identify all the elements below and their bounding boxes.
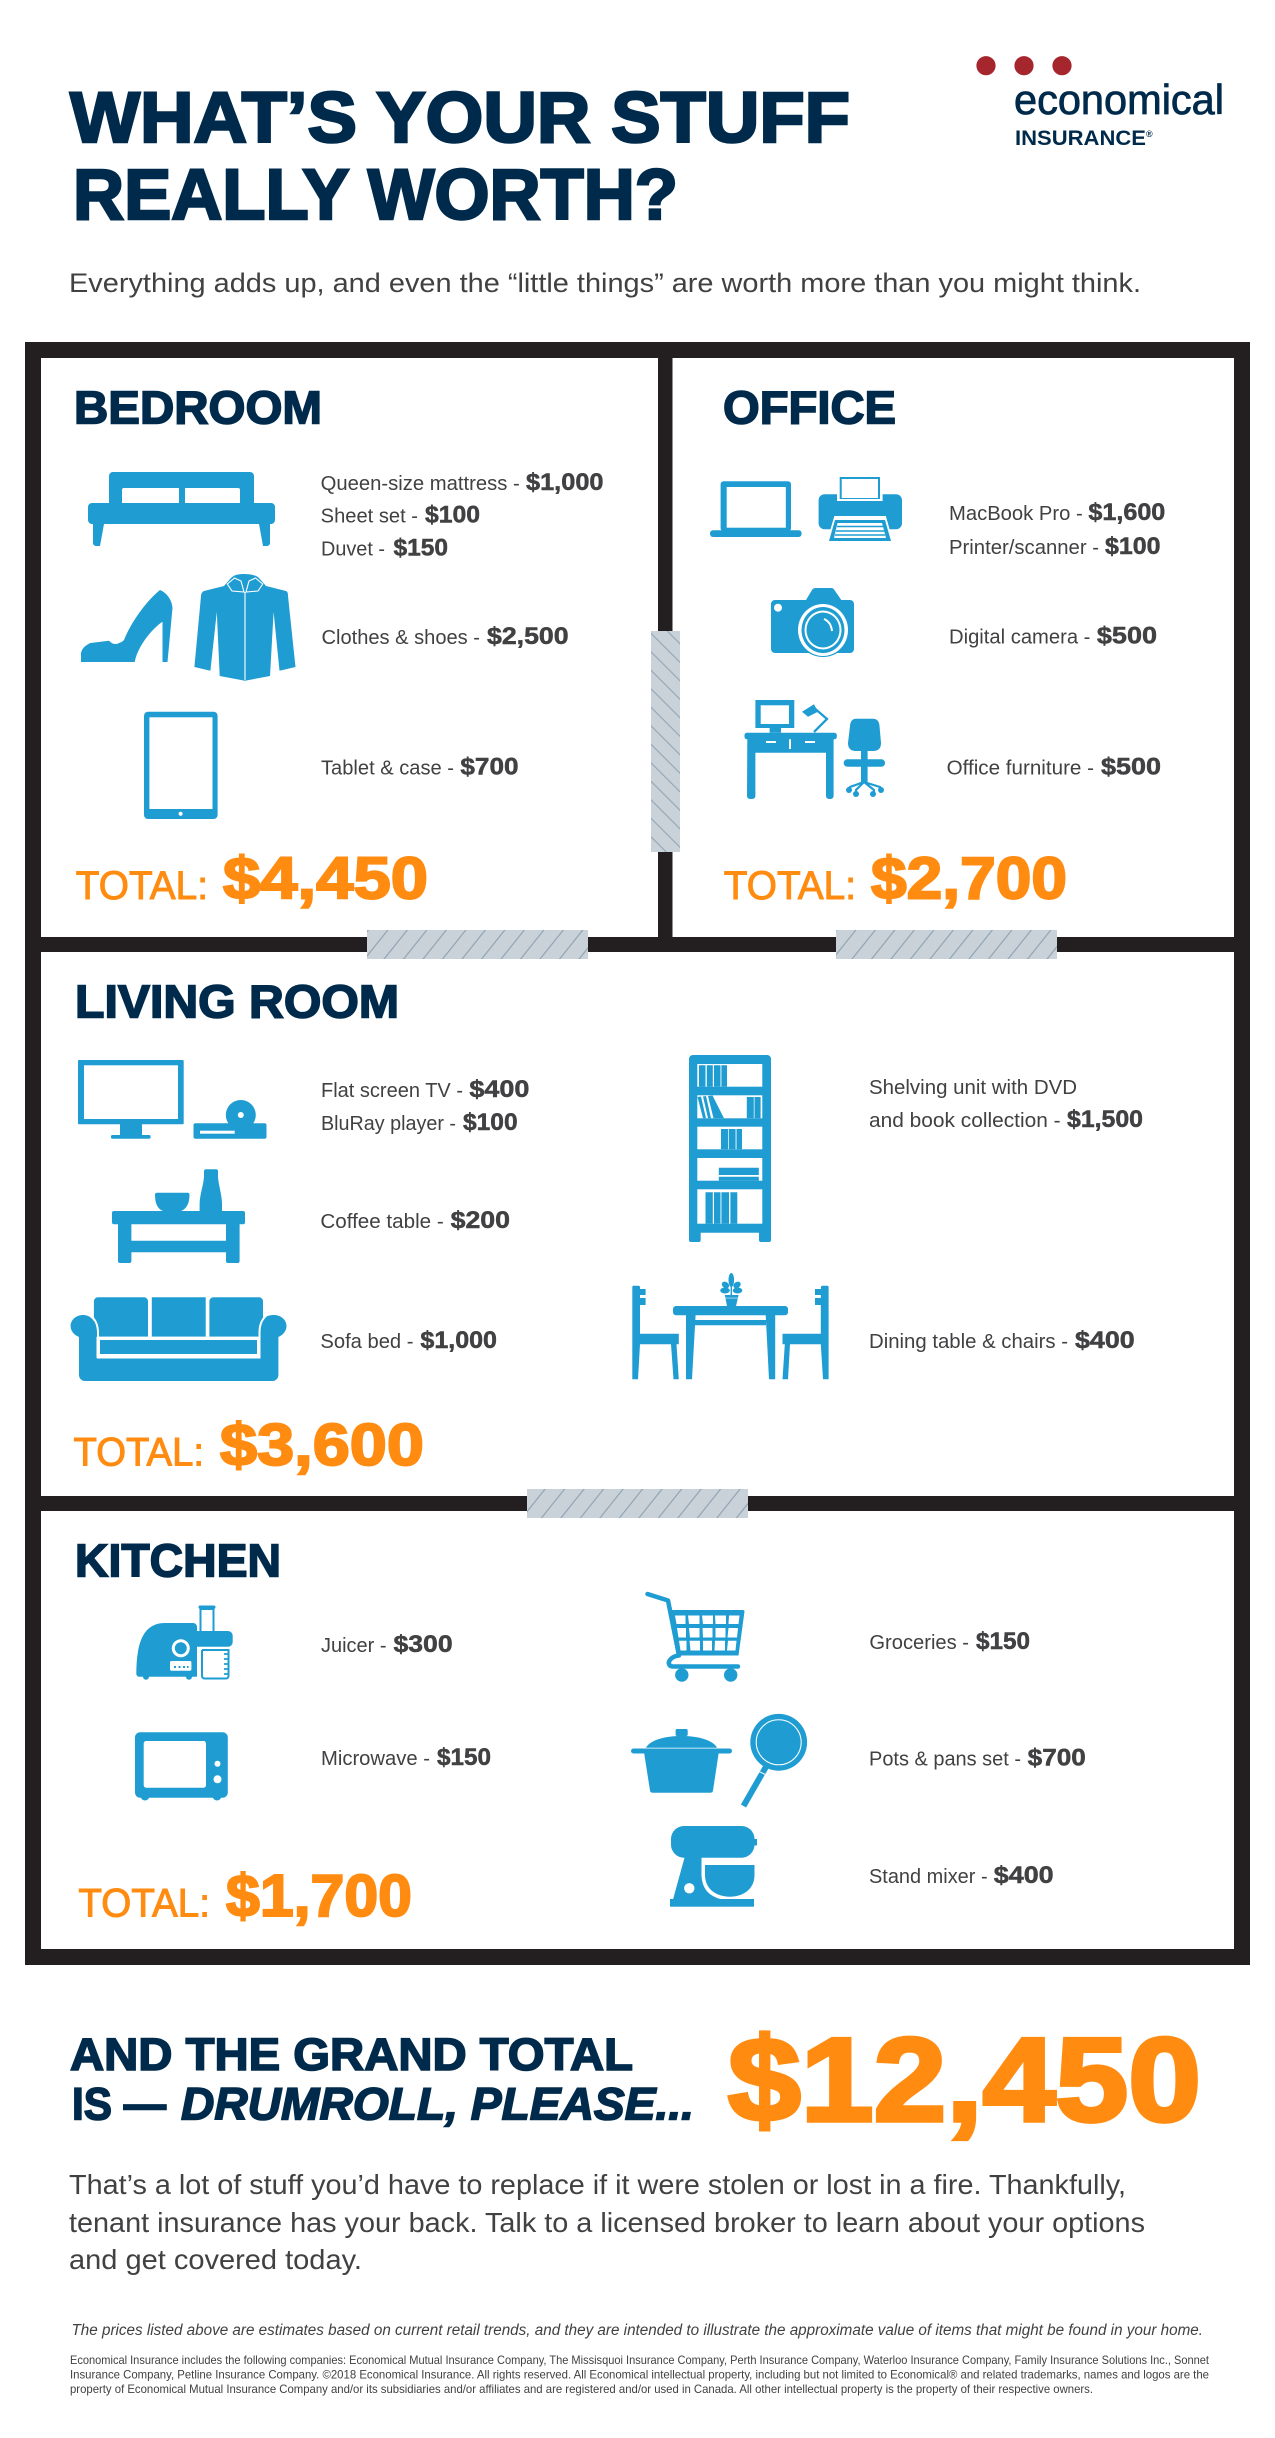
title: REALLY WORTH?	[73, 156, 678, 235]
icon: shopping cart	[648, 1594, 744, 1682]
item: dining table and chairs	[869, 1327, 1135, 1354]
heading: office: OFFICE	[723, 382, 896, 434]
item: coffee table: Coffee table -	[320, 1211, 444, 1233]
panel: kitchen	[75, 1534, 1086, 1929]
panel: bedroom	[74, 382, 604, 912]
grand total amount: $12,450	[728, 2014, 1201, 2147]
item: digital camera: Digital camera -	[949, 627, 1090, 649]
subtitle: Everything adds up, and even the “little things” are worth more than you might think.	[69, 268, 1141, 298]
item: stand mixer: $400	[994, 1862, 1054, 1889]
icon: desk, lamp and chair	[744, 700, 885, 799]
total: kitchen	[78, 1863, 412, 1929]
item: queen-size mattress: Queen-size mattress -	[321, 473, 520, 495]
item: shelving unit: and book collection -	[869, 1110, 1061, 1132]
icon: tablet	[144, 712, 218, 819]
item: duvet: Duvet -	[321, 539, 385, 561]
item: sofa bed: Sofa bed -	[320, 1331, 414, 1353]
total: bedroom	[76, 846, 428, 912]
item: juicer	[321, 1631, 453, 1658]
item: queen-size mattress: $1,000	[526, 469, 604, 496]
closing paragraph: tenant insurance has your back. Talk to a licensed broker to learn about your options	[69, 2207, 1145, 2238]
icon: shelving unit	[689, 1055, 771, 1242]
item: sheet set: Sheet set -	[321, 506, 418, 528]
closing paragraph: and get covered today.	[69, 2244, 362, 2275]
item: clothes and shoes: Clothes & shoes -	[322, 627, 480, 649]
item: printer scanner: $100	[1105, 533, 1160, 560]
total: office: TOTAL:	[724, 864, 856, 908]
closing paragraph: That’s a lot of stuff you’d have to replace if it were stolen or lost in a fire. Thankfully,	[69, 2169, 1126, 2200]
item: dining table and chairs: $400	[1075, 1327, 1135, 1354]
grand total heading: DRUMROLL, PLEASE...	[181, 2078, 694, 2130]
icon: bed	[88, 472, 275, 546]
item: sheet set	[321, 502, 480, 529]
item: microwave: $150	[437, 1744, 491, 1771]
item: groceries: Groceries -	[869, 1632, 969, 1654]
item: tablet and case	[321, 754, 518, 781]
item: macbook pro: MacBook Pro -	[949, 503, 1083, 525]
item: shelving unit: Shelving unit with DVD	[869, 1077, 1077, 1099]
logo: economical insurance: economical	[1014, 76, 1224, 123]
legal fine print	[70, 2353, 1210, 2396]
item: tablet and case: $700	[460, 754, 518, 781]
item: sheet set: $100	[425, 502, 480, 529]
item: pots and pans set: $700	[1028, 1745, 1086, 1772]
item: printer scanner: Printer/scanner -	[949, 537, 1099, 559]
total: living room	[74, 1412, 424, 1478]
item: microwave: Microwave -	[321, 1748, 430, 1770]
total: office: $2,700	[871, 846, 1067, 912]
icon: bluray player	[194, 1100, 266, 1139]
door: vertical between bedroom and office	[651, 631, 680, 852]
item: juicer: $300	[394, 1631, 453, 1658]
item: microwave	[321, 1744, 491, 1771]
item: groceries	[869, 1628, 1030, 1655]
item: clothes and shoes: $2,500	[487, 623, 569, 650]
grand total heading: IS —	[72, 2078, 166, 2130]
icon: flat screen tv	[78, 1060, 184, 1139]
total: living room: TOTAL:	[74, 1431, 204, 1475]
total: bedroom: TOTAL:	[76, 864, 208, 908]
title	[70, 79, 850, 235]
item: office furniture: $500	[1101, 754, 1161, 781]
window: office to living room	[836, 930, 1057, 959]
icon: pot and pan	[631, 1714, 807, 1806]
item: macbook pro	[949, 499, 1165, 526]
item: stand mixer: Stand mixer -	[869, 1866, 988, 1888]
icon: high-heel shoe	[81, 590, 172, 662]
item: bluray player	[321, 1109, 518, 1136]
legal fine print: property of Economical Mutual Insurance Company and/or its subsidiaries and/or affiliates and are registered and/or used in Canada. All other intellectual property is the property of their respective owners.	[70, 2382, 1093, 2396]
total: living room: $3,600	[220, 1412, 424, 1478]
item: pots and pans set	[869, 1745, 1086, 1772]
total: kitchen: $1,700	[226, 1863, 412, 1929]
floor plan walls	[25, 342, 1250, 1965]
item: queen-size mattress	[321, 469, 604, 496]
total: office	[724, 846, 1067, 912]
icon: printer scanner	[819, 474, 902, 541]
item: shelving unit	[869, 1077, 1143, 1133]
icon: jacket	[194, 574, 296, 681]
grand total heading: AND THE GRAND TOTAL	[70, 2029, 633, 2080]
item: flat screen tv	[321, 1076, 529, 1103]
heading: bedroom: BEDROOM	[74, 382, 322, 434]
title: WHAT’S YOUR STUFF	[70, 79, 850, 158]
window: bedroom to living room	[367, 930, 588, 959]
item: coffee table: $200	[451, 1207, 510, 1234]
grand total heading	[70, 2029, 694, 2130]
item: tablet and case: Tablet & case -	[321, 758, 454, 780]
legal fine print: Economical Insurance includes the following companies: Economical Mutual Insurance Company, The Missisquoi Insurance Company, Perth Insurance Company, Waterloo Insurance Company, Family Insurance Solutions Inc., Sonnet	[70, 2353, 1210, 2367]
panel: office	[710, 382, 1165, 912]
item: office furniture	[947, 754, 1161, 781]
total: bedroom: $4,450	[223, 846, 428, 912]
icon: stand mixer	[670, 1826, 757, 1907]
item: flat screen tv: $400	[469, 1076, 529, 1103]
item: shelving unit: $1,500	[1067, 1106, 1143, 1133]
logo: economical insurance: INSURANCE	[1015, 127, 1146, 150]
icon: sofa	[71, 1297, 286, 1381]
item: duvet: $150	[394, 535, 448, 562]
closing paragraph	[69, 2169, 1145, 2275]
item: digital camera	[949, 623, 1157, 650]
icon: coffee table	[112, 1169, 245, 1263]
legal fine print: Insurance Company, Petline Insurance Company. ©2018 Economical Insurance. All rights reserved. All Economical intellectual property, including but not limited to Economical® and related trademarks, names and logos are the	[70, 2368, 1209, 2382]
icon: digital camera	[771, 588, 854, 657]
disclaimer: italic note: The prices listed above are estimates based on current retail trends, and they are intended to illustrate the approximate value of items that might be found in your home.	[72, 2322, 1203, 2339]
window: living room to kitchen	[527, 1489, 748, 1518]
item: dining table and chairs: Dining table & chairs -	[869, 1331, 1068, 1353]
item: digital camera: $500	[1097, 623, 1157, 650]
item: flat screen tv: Flat screen TV -	[321, 1080, 463, 1102]
item: stand mixer	[869, 1862, 1054, 1889]
logo: economical insurance: ®	[1146, 129, 1153, 139]
item: pots and pans set: Pots & pans set -	[869, 1749, 1021, 1771]
icon: dining table and chairs	[632, 1273, 829, 1379]
item: coffee table	[320, 1207, 510, 1234]
item: juicer: Juicer -	[321, 1635, 386, 1657]
icon: juicer	[136, 1606, 233, 1680]
icon: microwave	[135, 1732, 228, 1800]
heading: living room: LIVING ROOM	[75, 976, 399, 1028]
item: groceries: $150	[976, 1628, 1030, 1655]
item: sofa bed	[320, 1327, 497, 1354]
item: bluray player: $100	[463, 1109, 518, 1136]
logo: economical insurance	[976, 56, 1224, 150]
item: duvet	[321, 535, 448, 562]
item: macbook pro: $1,600	[1088, 499, 1165, 526]
heading: kitchen: KITCHEN	[75, 1534, 281, 1586]
icon: laptop	[710, 481, 802, 537]
item: printer scanner	[949, 533, 1160, 560]
panel: living room	[71, 976, 1143, 1478]
item: sofa bed: $1,000	[420, 1327, 497, 1354]
total: kitchen: TOTAL:	[78, 1882, 210, 1926]
item: office furniture: Office furniture -	[947, 758, 1094, 780]
item: clothes and shoes	[322, 623, 569, 650]
item: bluray player: BluRay player -	[321, 1113, 456, 1135]
